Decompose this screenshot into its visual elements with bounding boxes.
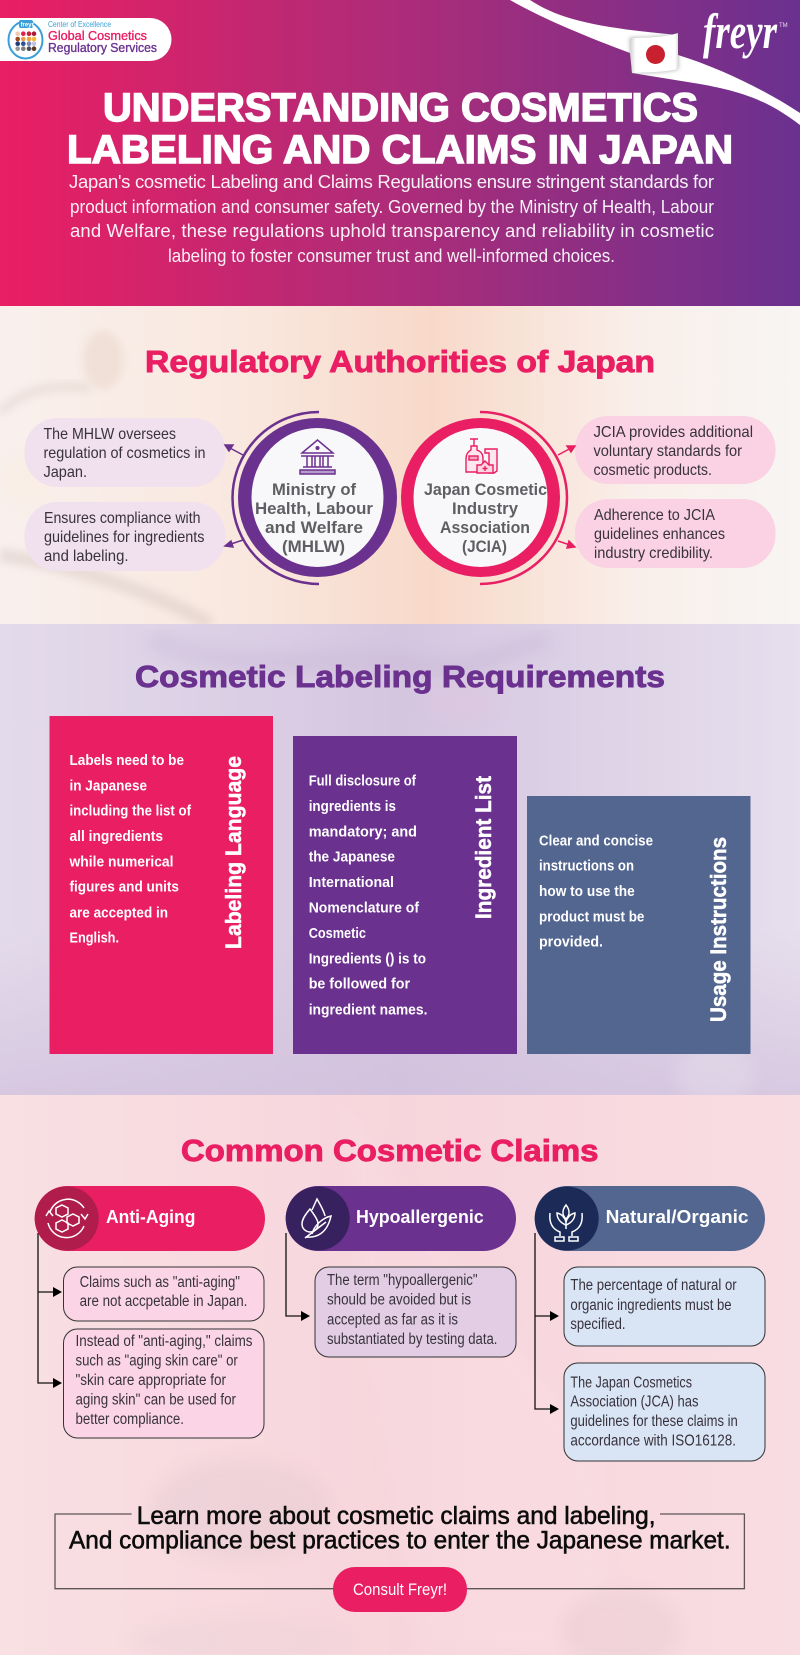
text box: anti-aging not acceptable — [64, 1267, 264, 1321]
label: JCIA: Industry — [452, 500, 519, 518]
callout: MHLW oversees: Japan. — [44, 464, 87, 481]
card: Labeling Language: English. — [70, 931, 119, 947]
callout: MHLW oversees: regulation of cosmetics in — [44, 445, 206, 462]
card: Ingredient List: Ingredient List — [471, 775, 496, 919]
callout: MHLW oversees — [24, 418, 226, 487]
card: Usage Instructions: Usage Instructions — [706, 837, 731, 1022]
logo: freyr: freyr — [703, 3, 777, 59]
panel: regulatory authorities — [0, 306, 800, 624]
card: Labeling Language: all ingredients — [70, 829, 163, 845]
circle: MHLW — [225, 412, 397, 584]
intro paragraph: Japan's cosmetic Labeling and Claims Regulations ensure stringent standards for — [69, 171, 714, 192]
card: Labeling Language: in Japanese — [70, 778, 147, 794]
heading: Regulatory Authorities of Japan — [145, 345, 655, 379]
callout: MHLW oversees: The MHLW oversees — [44, 426, 176, 443]
callout: JCIA voluntary standards: cosmetic products. — [594, 462, 712, 479]
icon: Japan flag — [630, 33, 678, 73]
icon: hands and plant — [550, 1205, 582, 1241]
logo: freyr: TM — [779, 23, 788, 29]
connector: Hypoallergenic — [286, 1233, 310, 1321]
claim header: Anti-Aging: Anti-Aging — [106, 1207, 195, 1227]
text box: anti-aging alternatives — [64, 1329, 264, 1438]
card: Ingredient List: International — [309, 875, 394, 891]
decorative white ribbon — [510, 0, 800, 125]
icon: hexagon molecule — [46, 1199, 88, 1238]
logo badge: Global Cosmetics Regulatory Services — [0, 18, 172, 61]
card: Usage Instructions — [527, 796, 750, 1054]
text box: natural percentage: organic ingredients must be — [570, 1297, 732, 1314]
label: MHLW: (MHLW) — [282, 538, 345, 556]
text box: anti-aging alternatives: aging skin" can be used for — [76, 1391, 236, 1408]
text box: anti-aging alternatives: better compliance. — [76, 1411, 184, 1428]
text box: hypoallergenic: should be avoided but is — [327, 1292, 471, 1309]
intro paragraph: labeling to foster consumer trust and well-informed choices. — [168, 245, 615, 266]
callout: JCIA credibility: guidelines enhances — [594, 526, 725, 543]
arrow: to JCIA callout two — [558, 541, 575, 548]
text box: hypoallergenic: The term "hypoallergenic" — [327, 1272, 478, 1289]
circle: JCIA — [401, 412, 575, 584]
card: Ingredient List: be followed for — [309, 977, 410, 993]
card: Labeling Language: Labels need to be — [70, 753, 184, 769]
callout: JCIA voluntary standards: voluntary standards for — [594, 443, 743, 460]
callout: MHLW compliance — [24, 502, 226, 571]
text box: anti-aging not acceptable: are not accpetable in Japan. — [80, 1293, 247, 1310]
call to action: Learn more about cosmetic claims and labeling, — [137, 1502, 656, 1530]
arrow: to JCIA callout one — [558, 446, 575, 455]
panel: common cosmetic claims — [0, 1095, 800, 1655]
callout: JCIA credibility — [575, 499, 776, 568]
card: Ingredient List — [293, 736, 517, 1054]
text box: hypoallergenic — [315, 1267, 516, 1357]
text box: JCA guidelines: accordance with ISO16128. — [570, 1433, 736, 1450]
title: UNDERSTANDING COSMETICS — [103, 86, 698, 130]
label: MHLW: Ministry of — [272, 481, 357, 499]
card: Labeling Language: figures and units — [70, 880, 179, 896]
card: Ingredient List: Full disclosure of — [309, 774, 416, 790]
button: Consult Freyr — [333, 1567, 467, 1612]
label: JCIA: Japan Cosmetic — [424, 481, 547, 499]
callout: MHLW compliance: Ensures compliance with — [44, 510, 200, 527]
text box: anti-aging alternatives: Instead of "anti-aging," claims — [76, 1333, 253, 1350]
card: Ingredient List: ingredient names. — [309, 1002, 428, 1018]
card: Usage Instructions: instructions on — [539, 859, 634, 875]
text box: JCA guidelines: guidelines for these claims in — [570, 1413, 738, 1430]
card: Usage Instructions: Clear and concise — [539, 833, 653, 849]
claim header: Natural/Organic: Natural/Organic — [606, 1207, 748, 1227]
card: Labeling Language: including the list of — [70, 804, 191, 820]
call to action: And compliance best practices to enter the Japanese market. — [69, 1526, 731, 1554]
label: MHLW: Health, Labour — [255, 500, 374, 518]
logo badge: Global Cosmetics Regulatory Services: Center of Excellence — [48, 20, 111, 29]
text box: anti-aging alternatives: "skin care appropriate for — [76, 1372, 226, 1389]
logo badge: Global Cosmetics Regulatory Services: Regulatory Services — [48, 40, 157, 55]
card: Ingredient List: Ingredients () is to — [309, 951, 426, 967]
label: JCIA — [424, 481, 547, 556]
card: Usage Instructions: provided. — [539, 935, 603, 951]
claim header: Hypoallergenic: Hypoallergenic — [356, 1207, 484, 1227]
connector: Anti-Aging — [38, 1233, 62, 1388]
text box: hypoallergenic: accepted as far as it is — [327, 1312, 458, 1329]
callout: JCIA voluntary standards — [575, 416, 776, 484]
icon: drops and leaf — [302, 1199, 331, 1238]
card: Ingredient List: mandatory; and — [309, 824, 417, 840]
intro paragraph: product information and consumer safety. Governed by the Ministry of Health, Labour — [70, 196, 714, 217]
card: Ingredient List: Nomenclature of — [309, 901, 419, 917]
claim header: Natural/Organic — [535, 1186, 765, 1251]
claim header: Hypoallergenic — [286, 1186, 516, 1251]
card: Labeling Language: Labeling Language — [221, 756, 246, 949]
title — [67, 86, 733, 172]
label: JCIA: (JCIA) — [462, 538, 507, 556]
card: Ingredient List: the Japanese — [309, 850, 395, 866]
arrow: to MHLW callout two — [225, 540, 243, 547]
text box: JCA guidelines — [564, 1363, 765, 1461]
connector: Natural/Organic — [535, 1233, 559, 1414]
heading: Cosmetic Labeling Requirements — [135, 660, 665, 694]
text box: hypoallergenic: substantiated by testing data. — [327, 1331, 497, 1348]
card: Usage Instructions: how to use the — [539, 884, 635, 900]
panel: header banner — [0, 0, 800, 306]
text box: JCA guidelines: Association (JCA) has — [570, 1394, 699, 1411]
call to action — [55, 1502, 744, 1612]
heading: Common Cosmetic Claims — [181, 1134, 598, 1168]
callout: MHLW compliance: and labeling. — [44, 548, 128, 565]
text box: anti-aging not acceptable: Claims such as "anti-aging" — [80, 1274, 240, 1291]
label: MHLW: and Welfare — [265, 519, 363, 537]
card: Usage Instructions: product must be — [539, 910, 644, 926]
panel: cosmetic labeling requirements — [0, 624, 800, 1105]
callout: JCIA voluntary standards: JCIA provides additional — [594, 424, 753, 441]
text box: natural percentage — [564, 1267, 765, 1346]
card: Labeling Language — [50, 716, 273, 1054]
callout: JCIA credibility: Adherence to JCIA — [594, 507, 715, 524]
text box: natural percentage: specified. — [570, 1316, 626, 1333]
card: Ingredient List: ingredients is — [309, 799, 396, 815]
text box: natural percentage: The percentage of natural or — [570, 1277, 737, 1294]
intro paragraph: and Welfare, these regulations uphold transparency and reliability in cosmetic — [70, 220, 714, 241]
title: LABELING AND CLAIMS IN JAPAN — [67, 128, 733, 172]
arrow: to MHLW callout one — [225, 445, 243, 455]
button: Consult Freyr: Consult Freyr! — [353, 1580, 447, 1599]
label: JCIA: Association — [440, 519, 530, 537]
logo badge: Global Cosmetics Regulatory Services: freyr — [20, 22, 35, 28]
icon: cosmetic bottles — [466, 439, 497, 473]
claim header: Anti-Aging — [35, 1186, 265, 1251]
label: MHLW — [255, 481, 374, 556]
text box: JCA guidelines: The Japan Cosmetics — [570, 1374, 692, 1391]
card: Labeling Language: while numerical — [69, 854, 174, 870]
callout: JCIA credibility: industry credibility. — [594, 545, 713, 562]
callout: MHLW compliance: guidelines for ingredients — [44, 529, 204, 546]
card: Labeling Language: are accepted in — [70, 905, 168, 921]
logo badge: Global Cosmetics Regulatory Services: Global Cosmetics — [48, 28, 147, 43]
intro paragraph — [69, 171, 714, 266]
icon: government building — [300, 440, 335, 474]
text box: anti-aging alternatives: such as "aging skin care" or — [76, 1353, 238, 1370]
card: Ingredient List: Cosmetic — [309, 926, 366, 942]
